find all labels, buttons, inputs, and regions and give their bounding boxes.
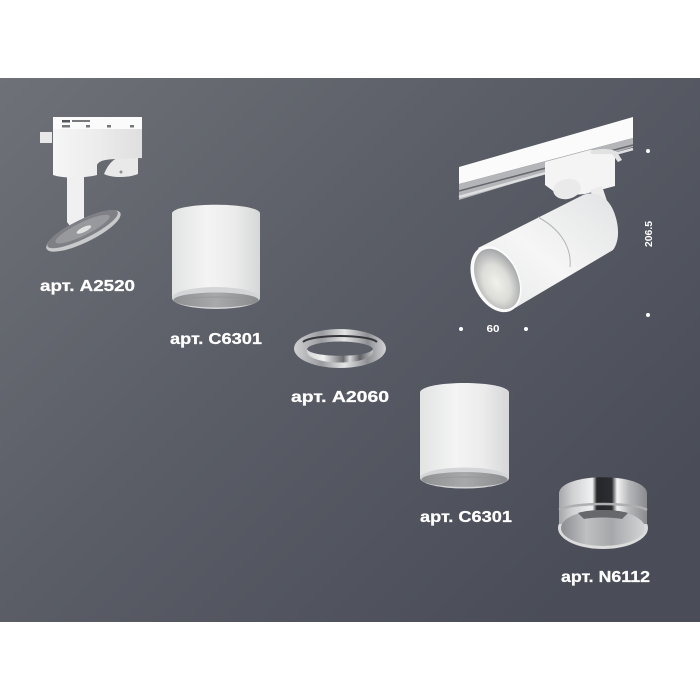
adapter disc (42, 203, 125, 259)
dimension: width 60: 60 (486, 324, 500, 335)
spotlight lens (460, 238, 532, 320)
label: A2520: арт. A2520 (40, 278, 135, 295)
label: A2060: арт. A2060 (291, 389, 389, 406)
spotlight adapter (545, 150, 615, 196)
dark gradient background panel (0, 78, 700, 622)
dimension: height 206.5 (644, 149, 655, 317)
product: ring A2060 (294, 329, 386, 368)
adapter hemisphere (104, 157, 138, 177)
label: N6112: арт. N6112 (561, 569, 650, 586)
label: C6301 second: арт. C6301 (420, 509, 512, 526)
product: track adapter A2520 (40, 117, 142, 259)
product: assembled track spotlight (459, 117, 633, 320)
cylinder opening (172, 287, 260, 309)
track rail (459, 117, 633, 184)
product: chrome ring N6112 (558, 477, 648, 549)
product: cylinder C6301 second (420, 383, 509, 488)
label: C6301: арт. C6301 (170, 331, 262, 348)
adapter body (53, 117, 142, 178)
adapter stem (67, 175, 84, 226)
cylinder opening (420, 468, 509, 488)
ring opening (307, 342, 373, 358)
adapter knob (40, 132, 52, 143)
ring interior (561, 510, 645, 546)
dimension: height 206.5: 206.5 (644, 221, 655, 247)
product: cylinder C6301 (172, 205, 260, 309)
spotlight body (478, 193, 618, 308)
dimension: width 60 (459, 324, 528, 335)
